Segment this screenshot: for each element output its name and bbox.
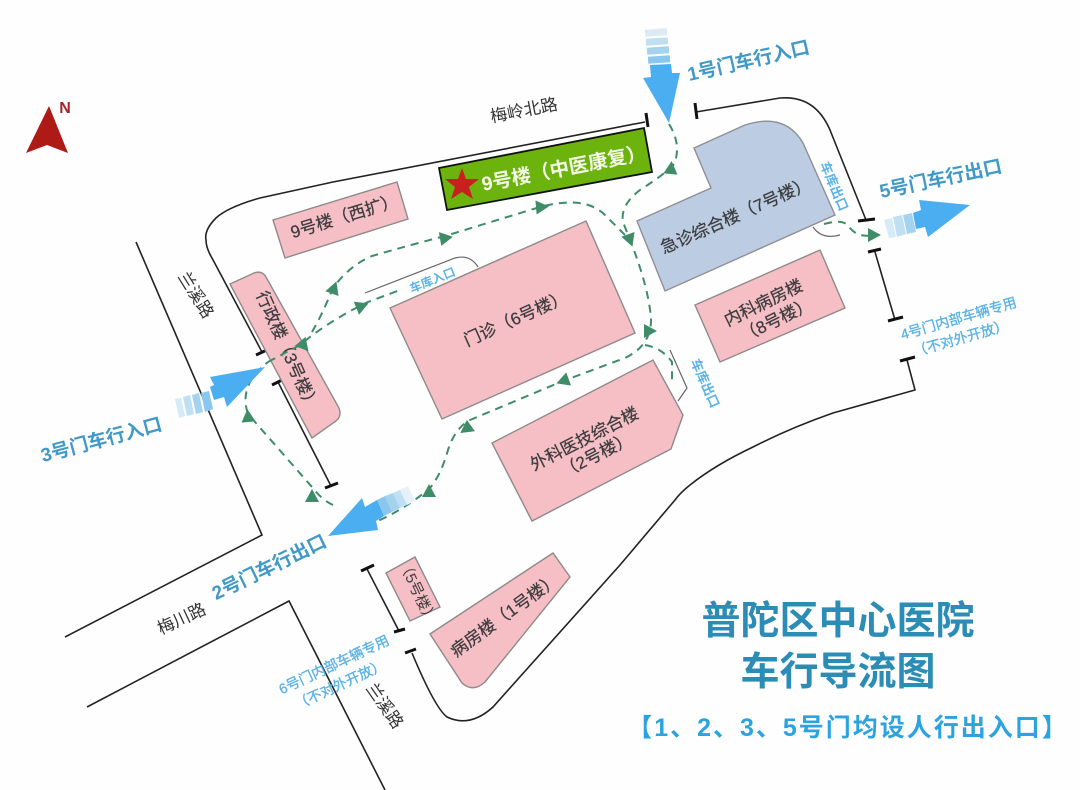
building: 外科医技综合楼(2号楼): （2号楼）	[558, 429, 635, 481]
building: 急诊综合楼(7号楼): 急诊综合楼（7号楼）	[658, 174, 814, 258]
label: gate 6 note: 6号门内部车辆专用	[276, 632, 392, 697]
building: 行政楼(3号楼)	[230, 272, 340, 438]
label: gate 4 note: 4号门内部车辆专用	[899, 294, 1018, 342]
building: 9号楼(中医康复)	[439, 128, 652, 210]
label: gate 5 exit: 5号门车行出口	[877, 154, 1004, 203]
label: gate 3 entrance: 3号门车行入口	[38, 412, 164, 467]
title: 车行导流图	[740, 651, 936, 694]
gate markers	[256, 103, 915, 653]
building: 外科医技综合楼(2号楼): 外科医技综合楼	[527, 404, 642, 475]
road outlines	[65, 98, 915, 790]
north arrow	[26, 100, 71, 153]
label: road 兰溪路 upper: 兰溪路	[174, 268, 217, 322]
label: road 梅川路: 梅川路	[155, 600, 209, 638]
label: garage entrance: 车库入口	[407, 264, 457, 296]
label: road 梅岭北路: 梅岭北路	[489, 95, 559, 126]
building: 门诊(6号楼)	[390, 221, 635, 419]
label: gate 1 entrance: 1号门车行入口	[685, 35, 812, 86]
building: 病房楼(1号楼)	[430, 553, 570, 688]
traffic routes	[240, 124, 881, 522]
title	[701, 600, 975, 694]
label: gate 6 note: （不对外开放）	[292, 657, 388, 712]
label: 9号楼(中医康复): 9号楼（中医康复）	[480, 141, 648, 196]
arrow: gate 2 exit	[328, 486, 415, 536]
label: garage exit 7: 车库出口	[817, 159, 851, 213]
route arrowheads	[240, 160, 881, 502]
label: garage exit 2: 车库出口	[688, 356, 723, 410]
building: 急诊综合楼(7号楼)	[637, 121, 835, 291]
label: road 兰溪路 lower: 兰溪路	[362, 680, 407, 732]
label: gate 4 note: （不对外开放）	[911, 317, 1010, 359]
building: 内科病房楼(8号楼): （8号楼）	[738, 295, 816, 346]
north arrow: N	[59, 100, 71, 117]
building: 9号楼(西扩): 9号楼（西扩）	[288, 191, 400, 242]
icon: red star	[445, 168, 479, 199]
arrow: gate 1 entrance	[643, 28, 680, 123]
arrow: gate 5 exit	[884, 200, 970, 238]
building: 5号楼: （5号楼）	[395, 558, 439, 627]
title: 普陀区中心医院	[701, 600, 975, 643]
building: 外科医技综合楼(2号楼)	[492, 360, 683, 521]
building: 行政楼(3号楼): 行政楼（3号楼）	[252, 288, 322, 413]
arrow: gate 3 entrance	[175, 367, 265, 418]
building: 内科病房楼(8号楼)	[695, 250, 845, 362]
building: 门诊(6号楼): 门诊（6号楼）	[461, 288, 571, 350]
building: 病房楼(1号楼): 病房楼（1号楼）	[447, 570, 562, 661]
label: gate 2 exit: 2号门车行出口	[208, 530, 330, 605]
building: 9号楼(西扩)	[273, 182, 408, 258]
subtitle: 【1、2、3、5号门均设人行出入口】	[627, 714, 1069, 742]
building: 内科病房楼(8号楼): 内科病房楼	[721, 276, 806, 330]
